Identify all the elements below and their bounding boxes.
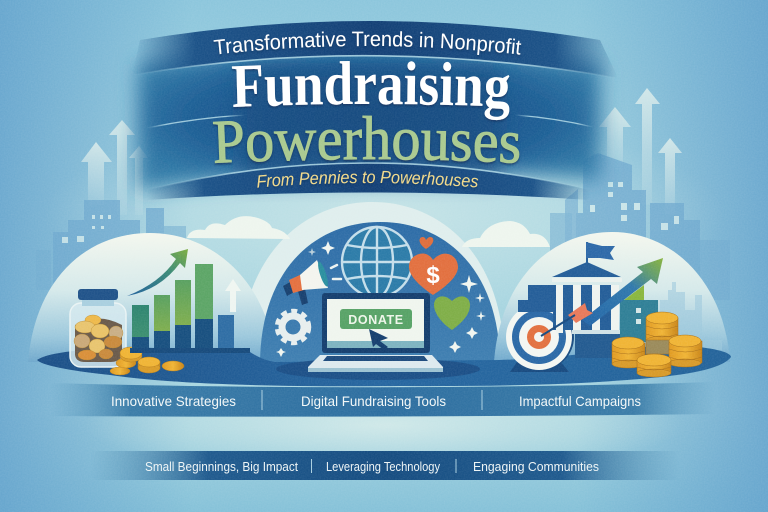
title line 2: Powerhouses: [212, 116, 520, 166]
left skyline: [36, 200, 186, 302]
white up arrow: [225, 279, 241, 312]
label: innovative strategies: Innovative Strategies: [111, 393, 236, 409]
tagline: engaging communities: Engaging Communities: [473, 459, 599, 474]
bar chart: [130, 264, 250, 353]
icon: sparkles: [276, 241, 486, 357]
icon: target: [506, 304, 574, 372]
loose coins: [110, 347, 184, 375]
banner kicker text: Transformative Trends in Nonprofit: [214, 31, 522, 56]
banner: [122, 21, 616, 204]
icon: globe: [342, 227, 412, 297]
right growth arrows: [599, 88, 682, 215]
icon: bank building: [518, 242, 658, 358]
left growth arrows: [81, 120, 148, 215]
icon: laptop with donate button: [308, 293, 443, 372]
growth arrow: [127, 249, 188, 296]
back light dome: [240, 202, 504, 360]
faint skyline inside right dome: [660, 282, 722, 350]
icon: dollar heart: $: [426, 262, 440, 289]
jar with coins: [70, 289, 126, 367]
tagline: leveraging technology: Leveraging Technology: [326, 459, 440, 474]
panel: campaigns dome: [494, 232, 730, 362]
icon: small heart: [420, 237, 433, 249]
icon: green heart: [434, 296, 470, 330]
icon: campaign arrow: [541, 258, 663, 336]
cloud left: [187, 216, 290, 239]
dark ground under laptop: [276, 358, 480, 380]
flag: [586, 242, 615, 260]
label row: [111, 390, 641, 410]
title line 1: Fundraising: [231, 61, 510, 122]
bottom tagline row: [145, 459, 599, 474]
cursor: [369, 329, 388, 350]
banner tagline: From Pennies to Powerhouses: [257, 170, 478, 190]
bottom band: [90, 451, 680, 480]
panel: innovative strategies dome: [28, 233, 275, 362]
donate button: DONATE: [348, 313, 404, 327]
icon: gear: [277, 311, 309, 343]
tagline: small beginnings: Small Beginnings, Big Impact: [145, 459, 298, 474]
ground: [37, 346, 731, 386]
label: impactful campaigns: Impactful Campaigns: [519, 393, 641, 409]
right skyline: [550, 153, 730, 300]
icon: dollar heart: [409, 254, 458, 295]
icon: megaphone: [283, 260, 341, 305]
panel: digital tools dome: [260, 222, 500, 365]
label band: [50, 382, 715, 417]
label: digital fundraising tools: Digital Fundraising Tools: [301, 393, 446, 409]
banner top band: [132, 21, 618, 78]
banner bottom band: [147, 163, 590, 200]
cloud right: [462, 221, 550, 247]
icon: coin stacks: [612, 312, 702, 377]
